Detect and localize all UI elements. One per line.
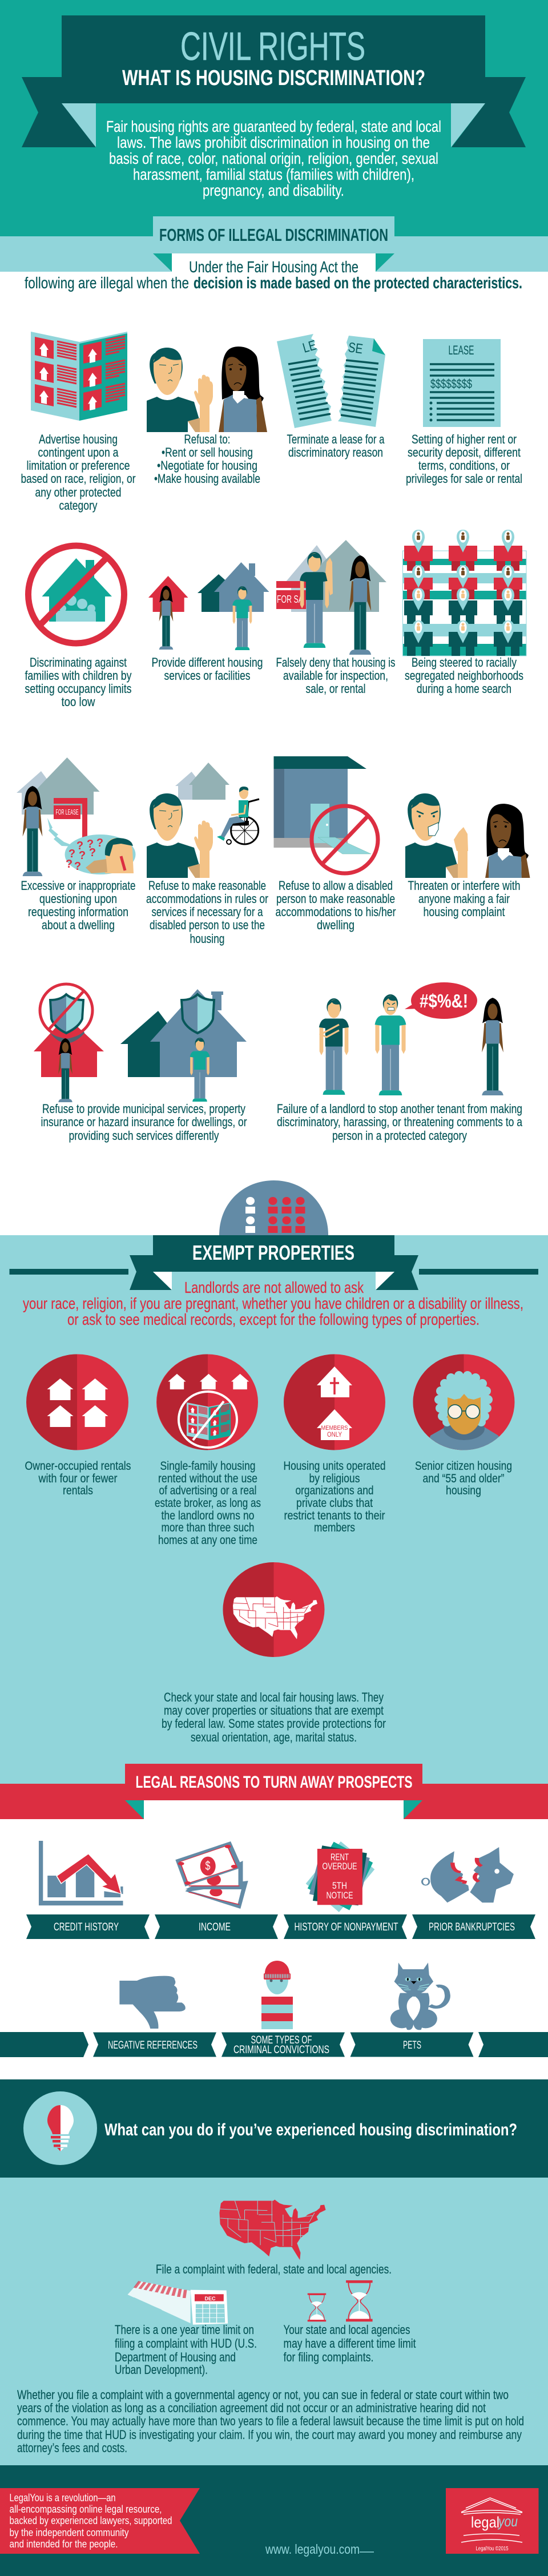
caption: religious organizations: private clubs that xyxy=(296,1497,373,1510)
caption: file a complaint: File a complaint with federal, state and local agencies. xyxy=(156,2262,392,2276)
caption: one year limit: Department of Housing and xyxy=(115,2350,236,2364)
caption: steered: during a home search xyxy=(417,682,511,696)
caption: falsely deny xyxy=(276,655,395,696)
caption: religious organizations xyxy=(283,1460,386,1534)
icon: excessive questioning: FOR LEASE xyxy=(56,808,79,816)
caption: steered: Being steered to racially xyxy=(412,655,517,670)
caption: single-family: rented without the use xyxy=(158,1472,257,1485)
icon: cat xyxy=(390,1962,448,2030)
caption: reasonable accommodations: housing xyxy=(190,932,225,946)
light band xyxy=(0,236,548,272)
caption: advertise: any other protected xyxy=(35,485,121,499)
caption: one year limit: filing a complaint with HUD (U.S. xyxy=(115,2336,257,2351)
icon: harassing tenant xyxy=(319,982,503,1095)
legal reasons banner xyxy=(0,1764,548,1819)
subtitle: WHAT IS HOUSING DISCRIMINATION? xyxy=(122,66,425,90)
icon: exempt properties people xyxy=(219,1180,328,1235)
ribbon: some types of criminal convictions: CRIMINAL CONVICTIONS xyxy=(233,2044,329,2056)
caption: single-family: Single-family housing xyxy=(160,1460,256,1473)
icon: lightbulb xyxy=(23,2091,97,2165)
caption: refusal: •Rent or sell housing xyxy=(162,445,253,459)
caption: reasonable accommodations: Refuse to make reasonable xyxy=(148,878,266,893)
caption: religious organizations: members xyxy=(314,1521,355,1534)
fair housing act intro: Under the Fair Housing Act the xyxy=(189,258,358,276)
icon: rent overdue notices: 5TH xyxy=(332,1880,347,1891)
footer flag with about text xyxy=(0,2488,200,2554)
icon: torn lease: SE xyxy=(347,339,364,357)
caption: families: families with children by xyxy=(25,668,131,683)
icon: religious and members only: ONLY xyxy=(327,1430,342,1438)
caption: municipal services: Refuse to provide municipal services, property xyxy=(42,1102,245,1116)
icon: single-family no advertising xyxy=(156,1354,258,1450)
website url: www. legalyou.com xyxy=(265,2542,360,2557)
text block: sue in court xyxy=(17,2388,524,2455)
icon: money bills xyxy=(175,1841,248,1909)
caption: senior citizen: Senior citizen housing xyxy=(415,1460,512,1473)
caption: owner-occupied: Owner-occupied rentals xyxy=(25,1460,131,1473)
icon: credit chart xyxy=(39,1841,123,1905)
icon: torn lease xyxy=(277,334,385,428)
caption: threaten: housing complaint xyxy=(424,905,505,919)
caption: failure of a landlord: person in a protected category xyxy=(332,1128,467,1143)
ribbon: history of nonpayment: HISTORY OF NONPAYMENT xyxy=(295,1921,398,1933)
icon: excessive questioning: ? xyxy=(87,838,94,850)
title ribbon xyxy=(22,15,526,147)
caption: owner-occupied: rentals xyxy=(63,1484,93,1497)
icon: rent overdue notices: NOTICE xyxy=(327,1890,353,1901)
icon: excessive questioning: ? xyxy=(74,860,81,873)
intro paragraph: laws. The laws prohibit discrimination in housing on the xyxy=(117,134,430,151)
icon: lease document: LEASE xyxy=(449,343,474,357)
intro paragraph: basis of race, color, national origin, religion, gender, sexual xyxy=(109,150,438,167)
caption: higher rent: terms, conditions, or xyxy=(418,458,510,473)
caption: refuse to allow: dwelling xyxy=(317,918,354,932)
text block: sue in court: attorney’s fees and costs. xyxy=(17,2441,127,2455)
caption: refuse to allow: person to make reasonable xyxy=(276,892,395,906)
icon: excessive questioning xyxy=(17,757,136,876)
caption: municipal services xyxy=(41,1102,247,1143)
caption: owner-occupied: with four or fewer xyxy=(38,1472,118,1485)
caption: state time limit: for filing complaints. xyxy=(283,2350,373,2364)
caption: reasonable accommodations: accommodations in rules or xyxy=(146,892,268,906)
caption: reasonable accommodations: disabled person to use the xyxy=(150,918,265,932)
footer flag with about text: and intended for the people. xyxy=(9,2538,118,2550)
ribbon: credit history xyxy=(26,1914,150,1939)
icon: no ramp building xyxy=(274,756,378,873)
ribbon: history of nonpayment xyxy=(284,1914,407,1939)
caption: terminate xyxy=(287,432,385,459)
icon: calendar xyxy=(127,2281,228,2325)
icon: refuse reasonable accommodations xyxy=(147,763,259,878)
caption: municipal services: insurance or hazard insurance for dwellings, or xyxy=(41,1115,247,1129)
caption: threaten xyxy=(408,878,521,919)
caption: terminate: Terminate a lease for a xyxy=(287,432,385,446)
caption: religious organizations: by religious xyxy=(309,1472,360,1485)
icon: broken piggy bank xyxy=(422,1847,514,1902)
caption: falsely deny: sale, or rental xyxy=(306,682,365,696)
icon: thumbs down xyxy=(119,1976,186,2029)
logo: you xyxy=(497,2513,518,2530)
icon: different housing xyxy=(148,562,269,650)
ribbon: pets: PETS xyxy=(403,2039,421,2051)
caption: refusal xyxy=(154,432,260,486)
caption: advertise: based on race, religion, or xyxy=(21,471,136,486)
caption: check state laws xyxy=(162,1690,386,1744)
caption: check state laws: may cover properties or situations that are exempt xyxy=(164,1703,384,1718)
caption: reasonable accommodations xyxy=(146,878,268,946)
caption: check state laws: Check your state and local fair housing laws. They xyxy=(164,1690,384,1704)
caption: refuse to allow xyxy=(275,878,396,932)
icon: excessive questioning: ? xyxy=(68,848,75,860)
caption: steered xyxy=(405,655,523,696)
caption: different housing xyxy=(152,655,263,683)
icon: excessive questioning: ? xyxy=(89,846,96,859)
fair housing act intro: following are illegal when the xyxy=(25,274,189,292)
icon: rent overdue notices: RENT xyxy=(331,1852,349,1863)
icon: rent overdue notices: OVERDUE xyxy=(322,1861,357,1872)
caption: falsely deny: Falsely deny that housing is xyxy=(276,655,395,670)
caption: terminate: discriminatory reason xyxy=(288,445,383,459)
panel: footer xyxy=(0,2465,548,2576)
icon: for sale falsely denied xyxy=(276,540,386,655)
icon: insured houses xyxy=(120,989,247,1102)
caption: reasonable accommodations: services if necessary for a xyxy=(152,905,263,919)
icon: refused municipal services xyxy=(34,984,104,1102)
caption: refuse to allow: Refuse to allow a disabled xyxy=(279,878,393,893)
caption: refusal: Refusal to: xyxy=(184,432,231,446)
caption: excessive questioning: Excessive or inappropriate xyxy=(21,878,136,893)
caption: excessive questioning: questioning upon xyxy=(39,892,117,906)
legal reasons banner: LEGAL REASONS TO TURN AWAY PROSPECTS xyxy=(136,1773,412,1792)
icon: owner-occupied houses xyxy=(26,1354,128,1450)
panel: what can you do body xyxy=(0,2178,548,2465)
intro paragraph: pregnancy, and disability. xyxy=(203,182,344,199)
icon: excessive questioning: ? xyxy=(76,840,83,852)
icon: excessive questioning: ? xyxy=(79,849,86,862)
caption: senior citizen: and “55 and older” xyxy=(422,1472,505,1485)
icon: segregated neighborhoods map xyxy=(403,530,526,656)
caption: refuse to allow: accommodations to his/her xyxy=(275,905,396,919)
caption: single-family: homes at any one time xyxy=(158,1534,257,1547)
caption: refusal: •Make housing available xyxy=(154,471,260,486)
exempt properties ribbon xyxy=(9,1235,538,1290)
caption: senior citizen xyxy=(415,1460,512,1497)
caption: municipal services: providing such services differently xyxy=(68,1128,219,1143)
ribbon: some types of criminal convictions: SOME TYPES OF xyxy=(251,2034,312,2046)
caption: excessive questioning: requesting information xyxy=(28,905,128,919)
icon: senior citizen xyxy=(413,1354,515,1453)
icon: rent overdue notices xyxy=(306,1841,374,1912)
caption: failure of a landlord xyxy=(277,1102,523,1143)
icon: lease document: $$$$$$$$ xyxy=(430,377,472,391)
caption: single-family xyxy=(155,1460,261,1547)
caption: owner-occupied xyxy=(25,1460,131,1497)
icon: no families house xyxy=(29,546,124,643)
footer flag with about text: backed by experienced lawyers, supported xyxy=(9,2515,172,2526)
footer flag with about text: by the independent community xyxy=(9,2527,129,2538)
caption: advertise xyxy=(21,432,136,513)
ribbon: pets xyxy=(350,2032,474,2057)
caption: refusal: •Negotiate for housing xyxy=(157,458,257,473)
ribbon: negative references xyxy=(93,2032,216,2057)
header band xyxy=(0,0,548,236)
ribbon: right partial xyxy=(478,2032,548,2057)
caption: single-family: more than three such xyxy=(161,1521,255,1534)
icon: calendar: DEC xyxy=(204,2296,216,2301)
caption: advertise: contingent upon a xyxy=(38,445,119,459)
caption: families xyxy=(25,655,131,709)
intro paragraph xyxy=(106,118,441,199)
footer flag with about text: all-encompassing online legal resource, xyxy=(9,2504,162,2515)
caption: higher rent xyxy=(406,432,522,486)
caption: advertise: category xyxy=(59,498,97,513)
forms of illegal discrimination banner xyxy=(153,216,394,272)
caption: different housing: Provide different housing xyxy=(152,655,263,670)
title: civil rights: CIVIL RIGHTS xyxy=(180,24,365,68)
icon: lease document xyxy=(423,339,501,427)
ribbon: income: INCOME xyxy=(199,1921,231,1933)
caption: single-family: the landlord owns no xyxy=(161,1509,255,1522)
panel: exempt properties background xyxy=(0,1235,548,1784)
ribbon: some types of criminal convictions xyxy=(221,2032,345,2057)
caption: families: setting occupancy limits xyxy=(25,682,131,696)
footer flag with about text: LegalYou is a revolution—an xyxy=(9,2492,115,2504)
caption: higher rent: Setting of higher rent or xyxy=(412,432,517,446)
logo: legal xyxy=(471,2514,499,2531)
forms of illegal discrimination banner: FORMS OF ILLEGAL DISCRIMINATION xyxy=(159,225,388,245)
icon: for sale falsely denied: FOR SA xyxy=(277,594,303,605)
ribbon: income xyxy=(155,1914,278,1939)
logo: LegalYou ©2015 xyxy=(476,2546,509,2552)
caption: single-family: of advertising or a real xyxy=(159,1484,257,1497)
caption: advertise: limitation or preference xyxy=(26,458,130,473)
red callout text: Landlords are not allowed to ask xyxy=(184,1279,364,1296)
caption: single-family: estate broker, as long as xyxy=(155,1497,261,1510)
ribbon: credit history: CREDIT HISTORY xyxy=(54,1921,119,1933)
intro paragraph: harassment, familial status (families with children), xyxy=(133,166,414,183)
caption: excessive questioning xyxy=(21,878,136,932)
logo xyxy=(446,2488,539,2554)
icon: prisoner xyxy=(261,1961,293,2029)
icon: state map circle xyxy=(223,1562,324,1657)
caption: excessive questioning: about a dwelling xyxy=(42,918,115,932)
caption: one year limit xyxy=(115,2323,257,2377)
caption: higher rent: security deposit, different xyxy=(408,445,521,459)
icon: excessive questioning: ? xyxy=(66,858,72,870)
icon: torn lease: LE xyxy=(301,337,318,356)
caption: religious organizations: organizations and xyxy=(296,1484,373,1497)
icon: money bills: $ xyxy=(206,1859,210,1873)
caption: religious organizations: restrict tenants to their xyxy=(284,1509,385,1522)
exempt properties ribbon: EXEMPT PROPERTIES xyxy=(192,1241,354,1264)
ribbon: prior bankruptcies: PRIOR BANKRUPTCIES xyxy=(429,1921,515,1933)
caption: check state laws: by federal law. Some states provide protections for xyxy=(162,1716,386,1731)
icon: US map xyxy=(219,2200,326,2260)
intro paragraph: Fair housing rights are guaranteed by federal, state and local xyxy=(106,118,441,135)
caption: families: Discriminating against xyxy=(30,655,127,670)
icon: hourglasses xyxy=(308,2280,373,2321)
caption: one year limit: Urban Development). xyxy=(115,2363,208,2377)
caption: falsely deny: available for inspection, xyxy=(283,668,388,683)
caption: religious organizations: Housing units operated xyxy=(283,1460,386,1473)
ribbon: left partial xyxy=(0,2032,88,2057)
icon: threatening man and woman xyxy=(405,793,530,878)
caption: one year limit: There is a one year time limit on xyxy=(115,2323,254,2337)
caption: check state laws: sexual orientation, age, marital status. xyxy=(191,1730,357,1744)
caption: state time limit: may have a different time limit xyxy=(283,2336,416,2351)
caption: different housing: services or facilities xyxy=(164,668,250,683)
icon: man refusing woman xyxy=(147,346,267,432)
red callout text xyxy=(23,1279,523,1328)
caption: state time limit: Your state and local agencies xyxy=(283,2323,410,2337)
ribbon: prior bankruptcies xyxy=(412,1914,535,1939)
caption: senior citizen: housing xyxy=(446,1484,481,1497)
caption: families: too low xyxy=(62,695,95,709)
caption: advertise: Advertise housing xyxy=(39,432,118,446)
panel: what can you do header xyxy=(0,2079,548,2178)
icon: newspaper ads xyxy=(31,332,127,421)
icon: excessive questioning: ? xyxy=(96,837,103,849)
caption: threaten: Threaten or interfere with xyxy=(408,878,521,893)
ribbon: negative references: NEGATIVE REFERENCES xyxy=(108,2039,198,2051)
fair housing act intro xyxy=(25,258,522,292)
icon: harassing tenant: #$%&! xyxy=(420,990,468,1011)
caption: threaten: anyone making a fair xyxy=(418,892,510,906)
caption: state time limit xyxy=(283,2323,416,2364)
icon: religious and members only xyxy=(284,1354,385,1450)
icon: religious and members only: MEMBERS xyxy=(321,1425,348,1432)
